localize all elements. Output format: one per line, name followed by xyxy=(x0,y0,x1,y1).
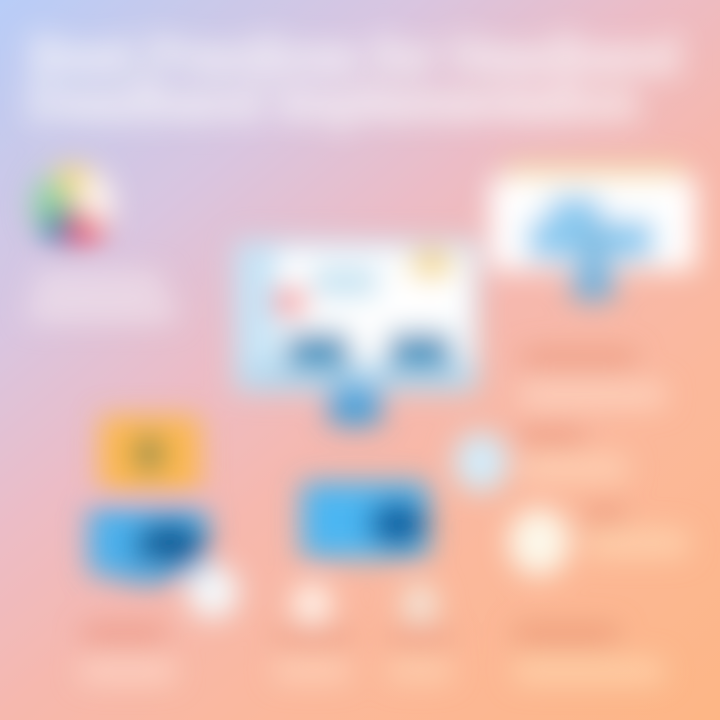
monitor dark area xyxy=(134,521,206,569)
yellow badge xyxy=(408,249,456,279)
title: Deadband Implementation xyxy=(28,74,638,130)
blue cluster xyxy=(528,196,654,260)
right dark card xyxy=(388,332,452,374)
icon: yellow square xyxy=(100,416,200,492)
red marker xyxy=(273,288,307,316)
icon: cream circle xyxy=(508,508,570,576)
yellow top edge xyxy=(505,164,685,180)
caption: bottom right xyxy=(514,626,664,682)
caption: bottom left xyxy=(80,626,176,682)
monitor base xyxy=(114,560,178,584)
center monitor dark area xyxy=(368,500,428,548)
text block: right lower xyxy=(586,506,688,556)
light chart strip xyxy=(312,266,378,298)
panel: top right map card xyxy=(490,164,696,302)
icon: left blue monitor xyxy=(88,506,208,584)
title xyxy=(28,28,680,130)
icon: colour wheel xyxy=(32,165,114,246)
blue node xyxy=(569,266,617,302)
white card xyxy=(490,178,696,270)
blue stem xyxy=(574,224,614,276)
icon: small circle right xyxy=(402,584,438,624)
text block: right middle xyxy=(518,428,628,480)
icon: light blue circle xyxy=(454,432,508,492)
title: Best Practices for Headband xyxy=(30,28,680,84)
icon: small white circle left xyxy=(187,565,239,619)
text block: right upper xyxy=(520,350,666,406)
dashboard content area xyxy=(278,250,470,362)
left dark card xyxy=(286,332,350,374)
bottom frame edge xyxy=(244,368,470,384)
node below dashboard xyxy=(328,386,382,426)
left text block xyxy=(28,272,176,322)
panel: central dashboard xyxy=(234,240,478,426)
icon: center blue monitor xyxy=(301,482,429,558)
yellow square glyph xyxy=(133,434,165,474)
caption: bottom centre right xyxy=(388,628,452,681)
icon: small circle centre xyxy=(292,584,332,624)
dashboard frame xyxy=(234,240,478,392)
caption: bottom centre xyxy=(274,628,350,681)
